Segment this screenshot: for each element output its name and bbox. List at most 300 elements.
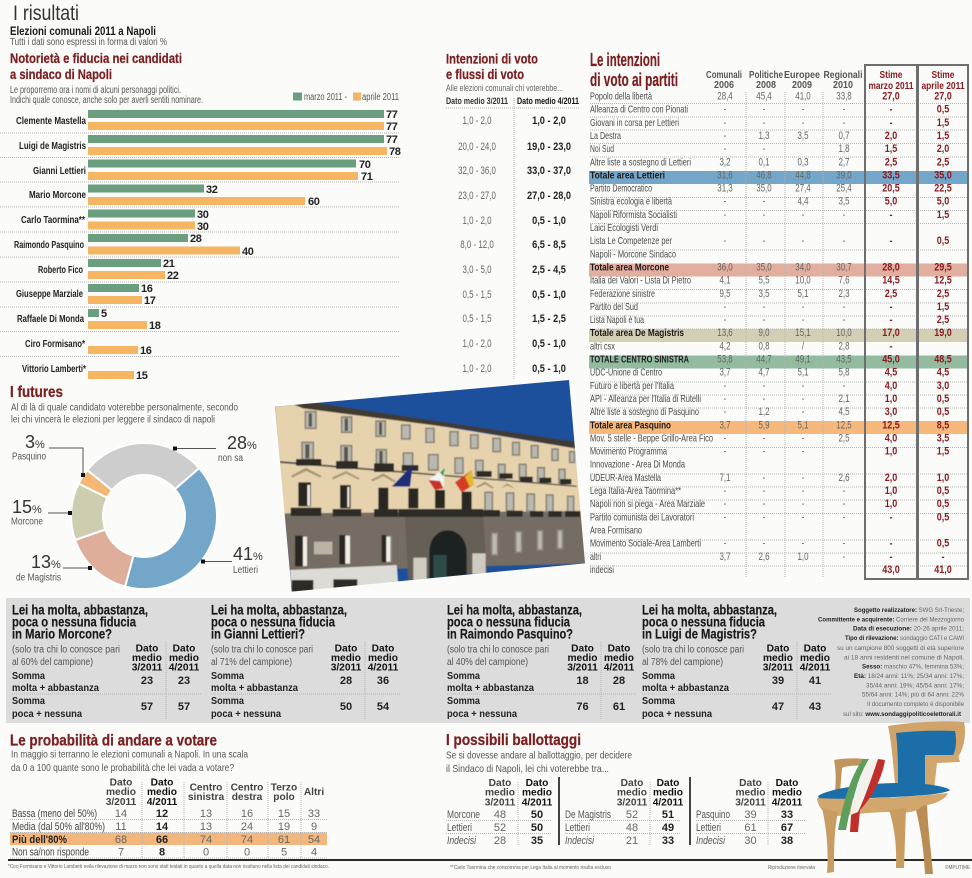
donut labels: 41%: [233, 544, 263, 564]
legend: marzo 2011 -: [304, 92, 347, 103]
ballottaggio: pasquino lettieri: 3/2011: [735, 798, 766, 808]
party labels: Totale area Lettieri: [590, 169, 665, 181]
fiducia: gianni lettieri: 50: [340, 701, 352, 713]
methodology note: 35/44 anni: 19%; 45/54 anni: 17%;: [866, 682, 964, 690]
column: politiche 2008: 4,7: [758, 367, 770, 379]
column: politiche 2008: [756, 90, 772, 563]
ballottaggio: morcone lettieri: 50: [531, 822, 543, 834]
candidate names: Mario Morcone: [29, 190, 86, 201]
party labels: Movimento Programma: [590, 446, 667, 458]
table: flussi marzo: 1,0 - 2,0: [462, 115, 492, 127]
column: stime marzo 2011: 2,5: [885, 288, 898, 300]
fiducia: raimondo pasquino: Dato: [608, 644, 630, 654]
column: stime aprile 2011: 3,0: [937, 380, 950, 392]
table header: probabilità: 3/2011: [106, 797, 137, 808]
intro text: probabilità: da 0 a 100 quante sono le probabilità che lei vada a votare?: [11, 762, 234, 774]
column: stime aprile 2011: 2,5: [937, 288, 950, 300]
column: comunali 2006: 3,7: [719, 419, 731, 432]
intro text: Le proporremo ora i nomi di alcuni personaggi politici.: [10, 85, 181, 96]
ballottaggio: morcone lettieri: Indecisi: [447, 835, 476, 847]
colour bands: [589, 171, 969, 434]
bar chart: notorietà: 60: [308, 196, 320, 208]
row labels: Più dell'80%: [12, 834, 67, 846]
ballottaggio: morcone lettieri: Morcone: [447, 809, 480, 821]
column: comunali 2006: 31,3: [717, 182, 733, 195]
ballottaggio: pasquino lettieri: medio: [735, 788, 766, 798]
photo: palazzo san giacomo: [270, 375, 590, 595]
heading: intenzioni di voto: Intenzioni di voto: [446, 50, 538, 66]
column: regionali 2010: -: [843, 511, 845, 524]
fiducia: raimondo pasquino: 3/2011: [567, 662, 598, 674]
column: comunali 2006: 4,1: [719, 274, 731, 287]
column: comunali 2006: 13,6: [717, 327, 733, 340]
fiducia: gianni lettieri: in Gianni Lettieri?: [211, 626, 305, 642]
column: comunali 2006: 9,5: [719, 288, 731, 300]
column: comunali 2006: -: [724, 485, 726, 497]
candidate names: Gianni Lettieri: [33, 166, 86, 177]
party labels: Totale area Morcone: [590, 262, 669, 274]
ballottaggio: de magistris lettieri: Indecisi: [565, 835, 594, 847]
fiducia: mario morcone: molta + abbastanza: [12, 682, 99, 694]
column: stime aprile 2011: 2,5: [937, 314, 950, 326]
ballottaggio: pasquino lettieri: Indecisi: [696, 835, 725, 847]
bar chart: notorietà: 30: [197, 221, 209, 233]
party labels: Lista Le Competenze per: [590, 235, 672, 247]
ballottaggio: pasquino lettieri: 30: [744, 835, 757, 847]
table header: [446, 96, 579, 106]
table: flussi aprile: 6,5 - 8,5: [532, 239, 566, 251]
intro text: futures: [11, 402, 238, 426]
footnotes: **Carlo Taormina che concorreva per Lega Italia al momento risulta escluso: [450, 865, 611, 871]
fiducia: mario morcone: in Mario Morcone?: [12, 626, 112, 642]
fiducia: mario morcone: medio: [132, 653, 162, 664]
panel: i futures: [10, 384, 263, 589]
table: flussi aprile: 33,0 - 37,0: [527, 165, 571, 177]
party labels: Area Formisano: [590, 524, 642, 536]
table values: probabilità: 68: [115, 834, 127, 846]
table header: probabilità: medio: [106, 787, 136, 798]
heading: le intenzioni: di voto ai partiti: [590, 70, 678, 90]
ballottaggio: de magistris lettieri: Dato: [621, 778, 643, 789]
column: europee 2009: 5,1: [797, 367, 809, 379]
party labels: Innovazione - Area Di Monda: [590, 459, 685, 471]
ballottaggio: de magistris lettieri: 48: [626, 822, 638, 834]
footnotes: Riproduzione riservata: [768, 865, 816, 871]
intro text: probabilità: [11, 748, 248, 774]
subtitle block: [10, 26, 167, 48]
heading: probabilità: Le probabilità di andare a votare: [10, 732, 217, 750]
table: flussi aprile: [527, 115, 571, 375]
column: stime marzo 2011: -: [889, 551, 893, 563]
methodology note: Tipo di rilevazione: sondaggio CATI e CAWI: [845, 635, 964, 642]
fiducia: luigi de magistris: 3/2011: [763, 662, 794, 674]
column: comunali 2006: -: [724, 301, 726, 313]
column: stime aprile 2011: 1,5: [937, 301, 950, 313]
party labels: [590, 90, 713, 576]
party labels: altri: [590, 551, 601, 563]
column: regionali 2010: -: [843, 551, 845, 563]
column: stime aprile 2011: 1,0: [937, 472, 950, 484]
table: flussi marzo: 3,0 - 5,0: [462, 264, 492, 276]
column: stime aprile 2011: 4,5: [937, 367, 950, 379]
column: stime marzo 2011: 14,5: [882, 275, 900, 287]
table values: probabilità: 74: [200, 834, 212, 846]
column: stime aprile 2011: 0,5: [937, 538, 950, 550]
bar chart: notorietà: [14, 109, 401, 382]
donut labels: [11, 432, 263, 584]
column: stime marzo 2011: 17,0: [882, 327, 900, 339]
subtitle block: Tutti i dati sono espressi in forma di valori %: [10, 37, 167, 48]
party labels: Partito Democratico: [590, 183, 652, 195]
column: regionali 2010: -: [843, 235, 845, 248]
table header: probabilità: destra: [232, 792, 263, 803]
ballottaggio: pasquino lettieri: 33: [781, 809, 793, 821]
fiducia: mario morcone: medio: [169, 653, 199, 664]
bar chart: notorietà: 17: [144, 295, 156, 307]
donut labels: 13%: [31, 552, 61, 572]
donut chart: [71, 443, 217, 589]
donut labels: Pasquino: [12, 452, 46, 462]
panel: probabilità di andare a votare: [10, 732, 327, 858]
column: stime aprile 2011: 8,5: [937, 420, 950, 432]
party labels: UDEUR-Area Mastella: [590, 472, 661, 484]
ballottaggio: de magistris lettieri: 4/2011: [653, 798, 684, 808]
column: politiche 2008: 2,6: [758, 551, 770, 563]
column: politiche 2008: 0,1: [758, 156, 770, 169]
ballottaggio: morcone lettieri: 52: [494, 822, 506, 834]
column: politiche 2008: 35,0: [756, 261, 772, 274]
ballottaggio: de magistris lettieri: medio: [617, 788, 647, 798]
ballottaggio: pasquino lettieri: 67: [781, 822, 793, 834]
column: regionali 2010: 2,7: [838, 156, 850, 169]
column headers: 2010: [833, 79, 853, 91]
column: europee 2009: 1,0: [797, 551, 809, 563]
fiducia: gianni lettieri: Lei ha molta, abbastanza,: [211, 602, 347, 618]
fiducia: raimondo pasquino: Somma: [447, 695, 480, 707]
methodology note: Età: 18/24 anni: 11%; 25/34 anni: 17%;: [854, 673, 964, 680]
table header: probabilità: Centro: [190, 782, 222, 794]
subtitle block: Elezioni comunali 2011 a Napoli: [10, 26, 156, 38]
column: politiche 2008: 5,5: [758, 274, 770, 287]
fiducia: luigi de magistris: poca o nessuna fiducia: [642, 614, 765, 630]
column: regionali 2010: 39,0: [836, 169, 852, 182]
ballottaggio: pasquino lettieri: [696, 778, 803, 847]
column: regionali 2010: 2,3: [838, 288, 850, 300]
table header: probabilità: [106, 778, 324, 808]
donut leaders: [48, 446, 232, 570]
column: stime aprile 2011: 48,5: [934, 354, 952, 366]
column: politiche 2008: -: [763, 209, 765, 221]
column: europee 2009: 10,0: [795, 274, 811, 287]
fiducia: raimondo pasquino: Dato: [571, 644, 594, 654]
fiducia: mario morcone: Dato: [173, 644, 195, 654]
table values: probabilità: 33: [308, 808, 320, 820]
fiducia: mario morcone: (solo tra chi lo conosce pari: [12, 644, 120, 656]
column: politiche 2008: -: [763, 314, 765, 327]
ballottaggio: de magistris lettieri: 3/2011: [617, 798, 648, 808]
column: stime aprile 2011: 5,0: [937, 196, 950, 208]
heading: le intenzioni: [590, 50, 678, 90]
column: politiche 2008: -: [763, 537, 765, 550]
column: stime aprile 2011: 29,5: [934, 262, 952, 274]
table header: probabilità: polo: [273, 792, 295, 803]
methodology note: Sesso: maschio 47%, femmina 53%;: [862, 664, 964, 670]
column: comunali 2006: -: [724, 104, 726, 116]
methodology note: Il documento completo è disponibile: [867, 701, 964, 708]
column: stime marzo 2011: 45,0: [882, 354, 900, 366]
column: stime aprile 2011: 35,0: [934, 170, 952, 182]
methodology note: Soggetto realizzatore: SWG Srl-Trieste;: [854, 607, 964, 614]
bar chart: notorietà: 78: [389, 146, 401, 158]
legend: [293, 92, 399, 103]
table header: probabilità: 4/2011: [147, 797, 178, 808]
row labels: Media (dal 50% all'80%): [12, 821, 105, 833]
column: stime aprile 2011: 22,5: [934, 183, 952, 195]
table values: probabilità: 54: [308, 834, 320, 846]
column: regionali 2010: 3,5: [838, 196, 850, 208]
column: europee 2009: 3,5: [797, 130, 809, 142]
fiducia: raimondo pasquino: 18: [576, 675, 589, 687]
column headers: [706, 69, 965, 92]
column: stime marzo 2011: 1,0: [885, 393, 898, 405]
fiducia: luigi de magistris: 41: [809, 675, 821, 687]
column: europee 2009: -: [802, 406, 804, 419]
fiducia: gianni lettieri: 36: [377, 675, 389, 687]
candidate names: Giuseppe Marziale: [16, 289, 83, 300]
column: regionali 2010: 5,8: [838, 367, 850, 379]
column: stime marzo 2011: 5,0: [885, 196, 898, 208]
column: stime marzo 2011: 4,0: [885, 380, 898, 392]
column: stime marzo 2011: -: [889, 538, 893, 550]
fiducia: gianni lettieri: 4/2011: [368, 662, 399, 674]
column: europee 2009: 34,0: [795, 261, 811, 274]
fiducia: luigi de magistris: medio: [763, 653, 793, 664]
table values: probabilità: 0: [244, 846, 250, 858]
table: flussi marzo: 23,0 - 27,0: [458, 190, 496, 202]
column: stime aprile 2011: 41,0: [934, 564, 952, 576]
heading: notorietà: a sindaco di Napoli: [10, 66, 112, 82]
column: europee 2009: -: [802, 472, 804, 484]
candidate names: [14, 116, 86, 375]
fiducia: gianni lettieri: poca + nessuna: [211, 708, 281, 720]
column: comunali 2006: -: [724, 196, 726, 208]
heading: intenzioni di voto: [446, 50, 538, 82]
column: stime marzo 2011: -: [889, 117, 893, 129]
fiducia: raimondo pasquino: [447, 602, 636, 720]
column headers: 2006: [714, 79, 734, 91]
column headers: 2009: [792, 79, 812, 91]
bar chart: notorietà: 77: [386, 134, 398, 146]
column: stime marzo 2011: 43,0: [882, 564, 900, 576]
fiducia: gianni lettieri: al 71% del campione): [211, 657, 292, 668]
fiducia: gianni lettieri: Somma: [211, 670, 244, 682]
column: regionali 2010: 1,8: [838, 143, 850, 156]
column headers: marzo 2011: [868, 80, 914, 92]
column: stime marzo 2011: 1,0: [885, 498, 898, 510]
column: comunali 2006: 53,8: [717, 353, 733, 366]
fiducia: gianni lettieri: [211, 602, 400, 720]
intro text: ballottaggi: Se si dovesse andare al ballottaggio, per decidere: [446, 750, 632, 762]
column: comunali 2006: -: [724, 406, 726, 419]
table values: probabilità: 66: [156, 834, 168, 846]
table: flussi marzo: 1,0 - 2,0: [462, 215, 492, 227]
candidate names: Carlo Taormina**: [21, 215, 85, 226]
ballottaggio: morcone lettieri: Lettieri: [447, 822, 472, 834]
table values: probabilità: 74: [241, 834, 253, 846]
column: politiche 2008: 1,2: [758, 406, 770, 419]
ballottaggio: de magistris lettieri: Lettieri: [565, 822, 590, 834]
column: regionali 2010: 25,4: [836, 182, 852, 195]
column: comunali 2006: 3,7: [719, 367, 731, 379]
column: stime marzo 2011: 27,0: [882, 91, 900, 103]
fiducia: raimondo pasquino: (solo tra chi lo conosce pari: [447, 644, 549, 656]
column: europee 2009: 27,4: [795, 182, 811, 195]
table values: probabilità: 12: [156, 808, 168, 820]
column: stime marzo 2011: -: [889, 104, 893, 116]
table values: probabilità: 0: [203, 846, 209, 858]
column: europee 2009: -: [802, 511, 804, 524]
donut labels: de Magistris: [16, 572, 61, 584]
candidate names: Vittorio Lamberti*: [22, 364, 86, 375]
party labels: Sinistra ecologia e libertà: [590, 196, 672, 208]
column: stime marzo 2011: 28,0: [882, 262, 900, 274]
intro text: probabilità: In maggio si terranno le elezioni comunali a Napoli. In una scala: [11, 748, 248, 760]
column: regionali 2010: 7,6: [838, 274, 850, 287]
fiducia: raimondo pasquino: medio: [604, 653, 634, 664]
column: europee 2009: -: [802, 314, 804, 327]
table: flussi marzo: 32,0 - 36,0: [458, 165, 496, 177]
column: stime aprile 2011: 1,5: [937, 209, 950, 221]
fiducia: luigi de magistris: (solo tra chi lo conosce pari: [642, 644, 744, 656]
party labels: Futuro e libertà per l'Italia: [590, 380, 674, 392]
fiducia: mario morcone: 57: [141, 701, 153, 713]
column: politiche 2008: -: [763, 445, 765, 458]
column: regionali 2010: 2,8: [838, 340, 850, 353]
ballottaggio: pasquino lettieri: Pasquino: [696, 809, 730, 821]
fiducia: luigi de magistris: 47: [772, 701, 784, 713]
fiducia: raimondo pasquino: Somma: [447, 670, 480, 682]
donut labels: Lettieri: [233, 565, 258, 576]
column: stime aprile 2011: 0,5: [937, 104, 950, 116]
column headers: 2008: [756, 79, 776, 91]
table: flussi marzo: [458, 115, 496, 375]
fiducia: luigi de magistris: in Luigi de Magistris?: [642, 626, 757, 642]
party labels: Alleanza di Centro con Pionati: [590, 104, 688, 116]
bottom rule: [8, 859, 972, 861]
column: europee 2009: /: [802, 340, 804, 353]
column: europee 2009: 41,0: [795, 90, 811, 103]
fiducia: luigi de magistris: Dato: [767, 644, 789, 654]
ballottaggio: pasquino lettieri: 4/2011: [772, 798, 803, 808]
panel: possibili ballottaggi: [446, 732, 805, 847]
fiducia: luigi de magistris: Dato: [804, 644, 826, 654]
column: comunali 2006: 28,4: [717, 90, 733, 103]
intro text: [10, 85, 203, 106]
ballottaggio: pasquino lettieri: Dato: [776, 778, 798, 789]
donut labels: 28%: [227, 433, 257, 453]
legend: aprile 2011: [362, 92, 399, 103]
ballottaggio: morcone lettieri: 50: [531, 809, 543, 821]
column: stime marzo 2011: 12,5: [882, 420, 900, 432]
ballottaggio: morcone lettieri: Dato: [489, 778, 511, 789]
column: europee 2009: -: [802, 235, 804, 248]
column: stime aprile 2011: 2,5: [937, 157, 950, 169]
column: comunali 2006: 36,0: [717, 261, 733, 274]
column: regionali 2010: -: [843, 314, 845, 327]
bar chart: notorietà: 18: [149, 320, 161, 332]
table values: probabilità: 5: [281, 846, 287, 858]
candidate names: Raimondo Pasquino: [14, 240, 84, 251]
column: politiche 2008: 45,4: [756, 90, 772, 103]
fiducia: raimondo pasquino: medio: [567, 653, 598, 664]
party labels: Totale area De Magistris: [590, 327, 684, 339]
panel: intenzioni di voto e flussi: Alle elezioni comunali chi voterebbe...: [446, 83, 563, 93]
party labels: API - Alleanza per l'Italia di Rutelli: [590, 393, 701, 405]
column: politiche 2008: 9,0: [758, 327, 770, 340]
column: stime aprile 2011: 12,5: [934, 275, 952, 287]
ballottaggio: pasquino lettieri: 61: [744, 822, 757, 834]
bar chart: notorietà: 77: [386, 121, 398, 133]
column: politiche 2008: 46,8: [756, 169, 772, 182]
column: europee 2009: 5,1: [797, 419, 809, 432]
methodology note: ai 18 anni residenti nel comune di Napoli.: [844, 654, 964, 662]
table values: probabilità: 19: [278, 821, 290, 833]
table values: probabilità: 8: [159, 846, 165, 858]
fiducia: mario morcone: Dato: [136, 644, 158, 654]
bar chart: notorietà: 77: [386, 109, 398, 121]
ballottaggio: morcone lettieri: 28: [494, 835, 506, 847]
column: stime aprile 2011: 0,5: [937, 393, 950, 405]
table values: probabilità: 15: [278, 808, 290, 820]
column: stime aprile 2011: 0,5: [937, 485, 950, 497]
column headers: Regionali: [824, 69, 863, 81]
fiducia: mario morcone: poca o nessuna fiducia: [12, 614, 136, 630]
table header: probabilità: Terzo: [271, 782, 297, 794]
column: comunali 2006: -: [724, 143, 726, 156]
methodology note: Data di esecuzione: 20-26 aprile 2011;: [853, 626, 964, 632]
table values: probabilità: 4: [311, 846, 317, 858]
table: flussi aprile: 1,5 - 2,5: [532, 313, 566, 325]
column: comunali 2006: -: [724, 445, 726, 458]
donut labels: 3%: [25, 432, 45, 452]
column: europee 2009: 0,3: [797, 156, 809, 169]
column: stime marzo 2011: 3,0: [885, 406, 898, 418]
table: flussi marzo: 1,0 - 2,0: [462, 363, 492, 375]
table values: probabilità: 61: [278, 834, 290, 846]
party labels: Italia dei Valori - Lista Di Pietro: [590, 275, 691, 287]
column: comunali 2006: -: [724, 117, 726, 129]
column: comunali 2006: -: [724, 314, 726, 327]
table: flussi aprile: 1,0 - 2,0: [532, 115, 566, 127]
fiducia: gianni lettieri: medio: [368, 653, 398, 664]
table: flussi aprile: 0,5 - 1,0: [532, 338, 566, 350]
bar chart: notorietà: 15: [136, 370, 148, 382]
column: stime aprile 2011: 1,5: [937, 117, 950, 129]
column: politiche 2008: 3,5: [758, 288, 770, 300]
column: comunali 2006: 3,7: [719, 551, 731, 563]
column: regionali 2010: -: [843, 498, 845, 511]
fiducia: gianni lettieri: Dato: [335, 644, 357, 654]
column headers: Politiche: [749, 69, 783, 81]
bar chart: notorietà: 22: [167, 270, 179, 282]
panel: intenzioni di voto e flussi: [446, 50, 580, 380]
column: politiche 2008: -: [763, 301, 765, 313]
table header: probabilità: Centro: [231, 782, 263, 794]
table: flussi marzo: 0,5 - 1,5: [462, 289, 492, 301]
fiducia: raimondo pasquino: molta + abbastanza: [447, 682, 534, 694]
column: politiche 2008: -: [763, 485, 765, 497]
bar chart: notorietà: 71: [361, 171, 373, 183]
